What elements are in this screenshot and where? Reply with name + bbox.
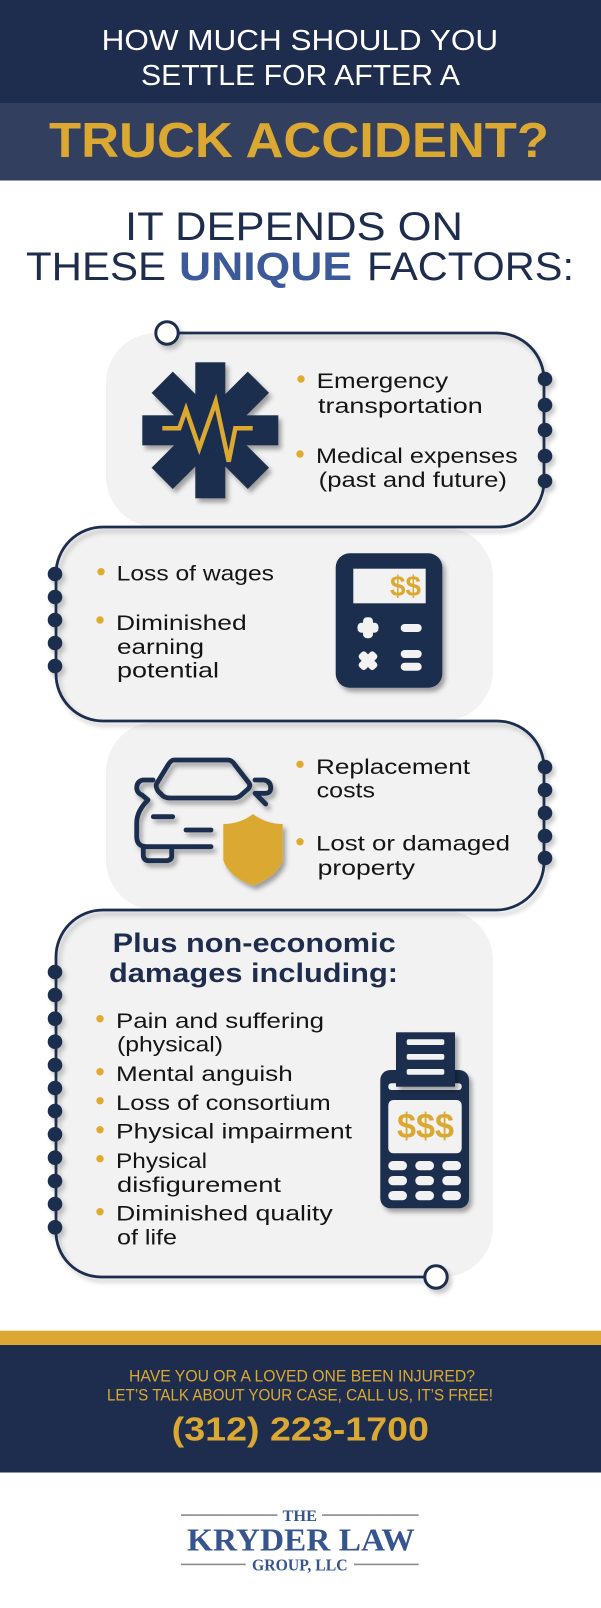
- text: panel 4 list: disfigurement: [117, 1174, 281, 1197]
- icon: calculator: [336, 553, 442, 688]
- icon: payment terminal: [380, 1032, 469, 1208]
- logo: The Kryder Law Group: KRYDER LAW: [187, 1522, 415, 1558]
- footer call to action: [0, 1331, 601, 1472]
- icon: star of life with pulse: [142, 362, 278, 498]
- text: panel 4 list: Loss of consortium: [116, 1092, 331, 1115]
- subheading: THESE: [26, 245, 166, 289]
- heading: non-economic damages: Plus non-economic: [113, 928, 396, 958]
- text: panel 4 list: (physical): [117, 1034, 223, 1057]
- text: panel 4 list: Physical: [116, 1150, 207, 1173]
- text: panel 3 list: Replacement: [316, 756, 470, 779]
- text: panel 3 list: property: [318, 857, 416, 880]
- footer call to action: LET’S TALK ABOUT YOUR CASE, CALL US, IT’S FREE!: [107, 1386, 493, 1404]
- header banner: [0, 0, 601, 103]
- logo: The Kryder Law Group: [181, 1508, 419, 1575]
- subheading: UNIQUE: [179, 245, 352, 289]
- text: panel 3 list: [296, 756, 510, 880]
- text: panel 4 list: Diminished quality: [116, 1203, 333, 1226]
- text: panel 2 list: potential: [117, 660, 219, 683]
- logo: The Kryder Law Group: THE: [282, 1508, 317, 1525]
- text: panel 2 list: [96, 563, 274, 683]
- subheading: [26, 205, 574, 289]
- text: panel 1 list: [296, 370, 518, 492]
- header title lines: SETTLE FOR AFTER A: [141, 60, 460, 92]
- connector line with end circles and dots: [48, 322, 552, 1288]
- icon: payment terminal: $$$: [397, 1107, 454, 1146]
- text: panel 3 list: costs: [317, 780, 375, 803]
- header title lines: HOW MUCH SHOULD YOU: [102, 25, 498, 57]
- logo: The Kryder Law Group: GROUP, LLC: [252, 1556, 348, 1575]
- panel backgrounds: [56, 333, 544, 1277]
- subheading: FACTORS:: [367, 245, 574, 289]
- text: panel 4 list: of life: [117, 1227, 177, 1250]
- heading: non-economic damages: [109, 928, 398, 988]
- truck accident band: [0, 103, 601, 180]
- text: panel 2 list: earning: [117, 636, 204, 659]
- text: panel 1 list: Emergency: [317, 370, 449, 393]
- text: panel 2 list: Loss of wages: [117, 563, 274, 586]
- truck accident band: TRUCK ACCIDENT?: [49, 114, 549, 168]
- text: panel 1 list: Medical expenses: [316, 445, 518, 468]
- icon: calculator: $$: [390, 571, 421, 603]
- icon: car with shield: [137, 760, 283, 886]
- text: panel 4 list: Mental anguish: [116, 1063, 293, 1086]
- text: panel 1 list: transportation: [318, 395, 483, 418]
- text: panel 2 list: Diminished: [116, 612, 247, 635]
- footer call to action: HAVE YOU OR A LOVED ONE BEEN INJURED?: [129, 1367, 475, 1385]
- subheading: IT DEPENDS ON: [125, 205, 463, 249]
- text: panel 4 list: Pain and suffering: [116, 1010, 324, 1033]
- text: panel 1 list: (past and future): [319, 469, 507, 492]
- text: panel 3 list: Lost or damaged: [316, 833, 510, 856]
- phone number: (312) 223-1700: [172, 1411, 429, 1448]
- heading: non-economic damages: damages including:: [109, 958, 398, 988]
- text: panel 4 list: [96, 1010, 352, 1250]
- header title lines: [102, 25, 498, 92]
- text: panel 4 list: Physical impairment: [116, 1121, 352, 1144]
